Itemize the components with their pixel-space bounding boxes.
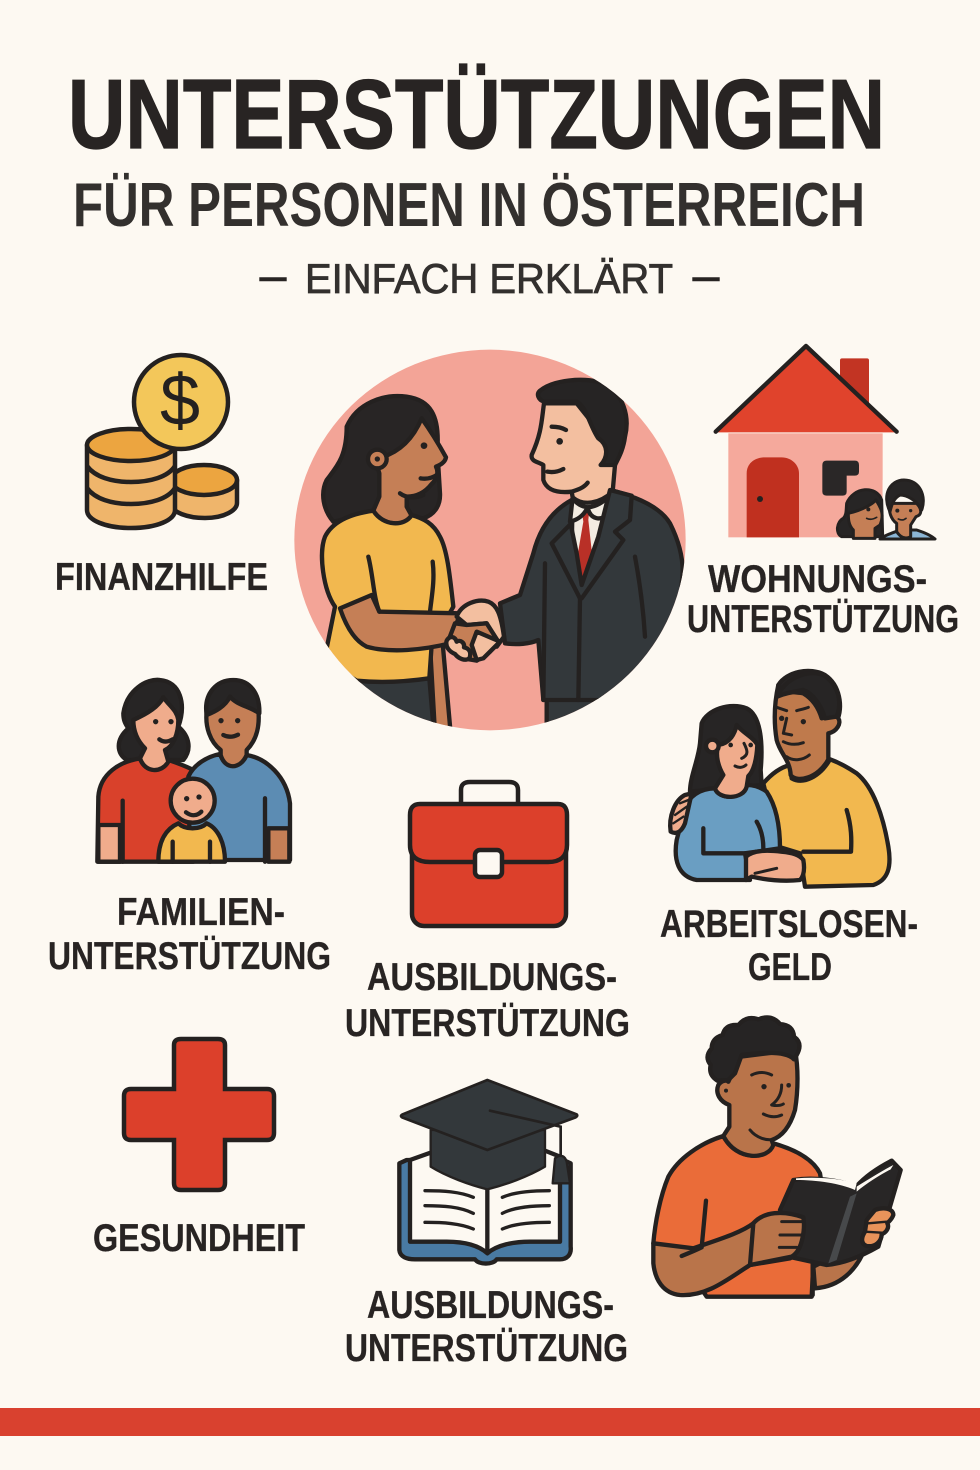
tagline: — xyxy=(693,262,719,292)
icon: house with couple xyxy=(715,346,937,540)
man xyxy=(500,380,687,737)
dollar coin xyxy=(134,355,228,449)
label: Wohnungsunterstützung xyxy=(687,558,959,641)
label: Ausbildungsunterstützung bottom xyxy=(345,1284,628,1370)
label: Arbeitslosengeld xyxy=(660,903,918,989)
dollar coin: $ xyxy=(160,361,200,441)
label: Ausbildungsunterstützung top: UNTERSTÜTZUNG xyxy=(345,1002,630,1045)
label: Wohnungsunterstützung: WOHNUNGS- xyxy=(708,558,927,601)
label: Arbeitslosengeld: ARBEITSLOSEN- xyxy=(660,903,918,946)
couple xyxy=(837,480,937,540)
label: Ausbildungsunterstützung top xyxy=(345,956,630,1045)
icon: family xyxy=(97,680,290,862)
icon: coins with dollar xyxy=(87,355,237,528)
woman xyxy=(322,396,460,733)
central illustration: handshake xyxy=(294,350,687,737)
label: Familienunterstützung: UNTERSTÜTZUNG xyxy=(48,935,331,978)
icon: red cross xyxy=(124,1039,274,1190)
small coin stack xyxy=(171,465,237,518)
label: Familienunterstützung: FAMILIEN- xyxy=(117,891,285,934)
icon: couple supporting xyxy=(670,671,890,887)
bottom red bar xyxy=(0,1408,980,1436)
label: Ausbildungsunterstützung bottom: UNTERSTÜTZUNG xyxy=(345,1327,628,1370)
tagline: — xyxy=(260,262,286,292)
tagline: EINFACH ERKLÄRT xyxy=(305,255,673,302)
label: Arbeitslosengeld: GELD xyxy=(748,946,832,989)
label: Finanzhilfe: FINANZHILFE xyxy=(55,556,268,599)
large coin stack xyxy=(87,429,175,528)
icon: briefcase xyxy=(410,782,567,926)
icon: person reading xyxy=(653,1017,901,1297)
label: Ausbildungsunterstützung bottom: AUSBILDUNGS- xyxy=(367,1284,614,1327)
label: Ausbildungsunterstützung top: AUSBILDUNGS- xyxy=(367,956,617,999)
handshake xyxy=(446,601,504,661)
label: Gesundheit: GESUNDHEIT xyxy=(93,1217,305,1260)
label: Familienunterstützung xyxy=(48,891,331,978)
icon: graduation cap on book xyxy=(399,1080,577,1264)
